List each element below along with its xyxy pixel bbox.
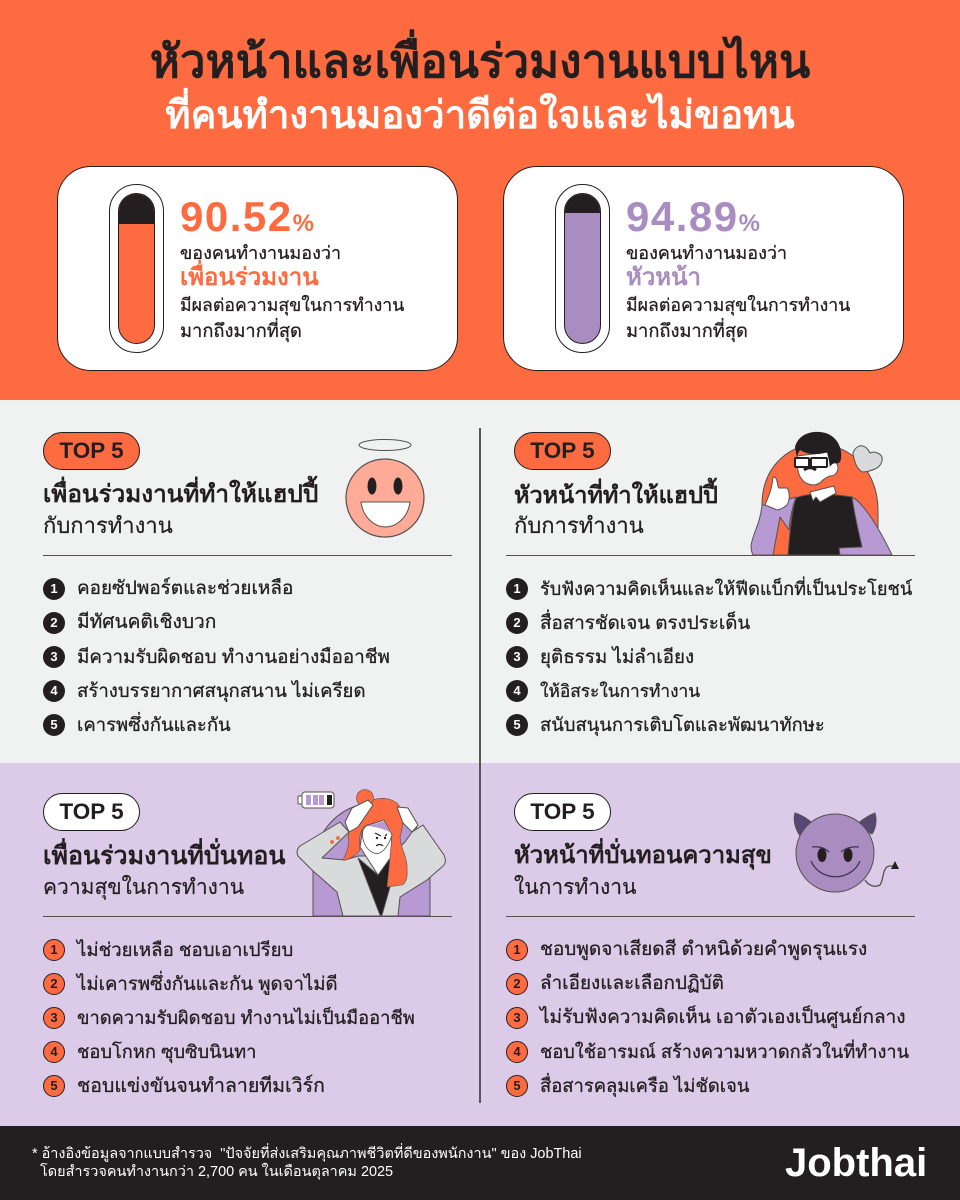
stat line 1: ของคนทำงานมองว่า (626, 243, 787, 263)
stat line 1: ของคนทำงานมองว่า (180, 243, 341, 263)
logo: Jobthai (785, 1141, 927, 1185)
footnote (32, 1143, 582, 1180)
footer (0, 1126, 960, 1200)
footnote: * อ้างอิงข้อมูลจากแบบสำรวจ "ปัจจัยที่ส่งเสริมคุณภาพชีวิตที่ดีของพนักงาน" ของ JobThai (32, 1146, 582, 1162)
title: หัวหน้าและเพื่อนร่วมงานแบบไหน (150, 36, 810, 87)
item 2: สื่อสารชัดเจน ตรงประเด็น (540, 612, 750, 633)
ranked list (43, 939, 415, 1097)
item 4: ชอบใช้อารมณ์ สร้างความหวาดกลัวในที่ทำงาน (540, 1042, 909, 1062)
item 3: 3 (513, 649, 521, 664)
item 4: 4 (50, 1044, 58, 1059)
gauge: 90.52% (109, 184, 164, 353)
subheading: กับการทำงาน (514, 513, 644, 538)
badge: TOP 5 (530, 438, 595, 463)
badge (43, 432, 140, 470)
stat highlight: หัวหน้า (626, 264, 701, 291)
item 4: 4 (50, 683, 58, 698)
stat value: 90.52% (180, 193, 314, 240)
item 4: ชอบโกหก ซุบซิบนินทา (77, 1041, 256, 1062)
stat line 2: มีผลต่อความสุขในการทำงาน (180, 295, 404, 315)
item 5: สื่อสารคลุมเครือ ไม่ชัดเจน (540, 1075, 749, 1096)
item 5: ชอบแข่งขันจนทำลายทีมเวิร์ก (77, 1075, 325, 1097)
item 3: ยุติธรรม ไม่ลำเอียง (540, 646, 694, 667)
subheading: กับการทำงาน (43, 513, 173, 538)
ranked list (506, 576, 912, 736)
item 5: สนับสนุนการเติบโตและพัฒนาทักษะ (540, 714, 825, 735)
gauge: 94.89% (555, 184, 610, 353)
item 4: 4 (513, 1044, 521, 1059)
item 1: ชอบพูดจาเสียดสี ตำหนิด้วยคำพูดรุนแรง (540, 939, 867, 960)
item 2: มีทัศนคติเชิงบวก (77, 612, 216, 633)
icon: devil smiley (794, 812, 899, 892)
icon: angel smiley (345, 439, 425, 538)
panel: draining bosses (506, 793, 915, 1098)
icon: stressed woman (296, 789, 446, 916)
item 4: สร้างบรรยากาศสนุกสนาน ไม่เครียด (77, 680, 366, 701)
heading: เพื่อนร่วมงานที่บั่นทอน (43, 842, 285, 870)
panel: happy colleagues (43, 432, 452, 736)
stat line 2: มีผลต่อความสุขในการทำงาน (626, 295, 850, 315)
item 1: รับฟังความคิดเห็นและให้ฟีดแบ็กที่เป็นประโยชน์ (540, 579, 912, 599)
item 3: 3 (513, 1010, 521, 1025)
stat line 3: มากถึงมากที่สุด (180, 320, 302, 341)
footnote: โดยสำรวจคนทำงานกว่า 2,700 คน ในเดือนตุลาคม 2025 (40, 1164, 393, 1180)
item 1: 1 (50, 581, 58, 596)
item 2: 2 (513, 615, 521, 630)
panel: draining colleagues (43, 789, 452, 1097)
panel: happy background (0, 400, 960, 763)
ranked list (506, 938, 909, 1098)
icon: battery (298, 792, 334, 808)
badge: TOP 5 (59, 438, 124, 463)
item 3: 3 (50, 649, 58, 664)
badge (43, 793, 140, 831)
stat card: bosses (503, 166, 904, 371)
badge: TOP 5 (530, 799, 595, 824)
panel: happy bosses (506, 432, 915, 736)
header band (0, 0, 960, 400)
item 1: 1 (50, 942, 58, 957)
stat card: colleagues (57, 166, 458, 371)
item 5: 5 (513, 1078, 521, 1093)
item 5: 5 (50, 1078, 58, 1093)
item 1: 1 (513, 581, 521, 596)
panel: drain background (0, 763, 960, 1126)
heading: เพื่อนร่วมงานที่ทำให้แฮปปี้ (43, 481, 318, 508)
stat value: 94.89% (626, 193, 760, 240)
item 1: ไม่ช่วยเหลือ ชอบเอาเปรียบ (77, 939, 293, 960)
item 2: ลำเอียงและเลือกปฏิบัติ (540, 973, 724, 994)
item 4: ให้อิสระในการทำงาน (540, 681, 700, 701)
item 3: ไม่รับฟังความคิดเห็น เอาตัวเองเป็นศูนย์กลาง (540, 1007, 906, 1028)
center divider (479, 428, 481, 1103)
item 4: 4 (513, 683, 521, 698)
item 2: 2 (50, 976, 58, 991)
item 1: 1 (513, 942, 521, 957)
stat line 3: มากถึงมากที่สุด (626, 320, 748, 341)
icon: boss with thumbs up (750, 432, 892, 555)
item 5: เคารพซึ่งกันและกัน (77, 714, 231, 735)
item 5: 5 (50, 717, 58, 732)
stat highlight: เพื่อนร่วมงาน (180, 264, 319, 291)
subheading: ในการทำงาน (514, 876, 636, 899)
item 3: มีความรับผิดชอบ ทำงานอย่างมืออาชีพ (77, 646, 390, 667)
badge (514, 432, 611, 470)
item 1: คอยซัปพอร์ตและช่วยเหลือ (77, 578, 293, 599)
heading: หัวหน้าที่ทำให้แฮปปี้ (514, 482, 718, 508)
item 2: 2 (513, 976, 521, 991)
subtitle: ที่คนทำงานมองว่าดีต่อใจและไม่ขอทน (165, 94, 795, 137)
item 2: ไม่เคารพซึ่งกันและกัน พูดจาไม่ดี (77, 973, 338, 994)
item 3: ขาดความรับผิดชอบ ทำงานไม่เป็นมืออาชีพ (77, 1007, 415, 1028)
ranked list (43, 577, 390, 736)
item 5: 5 (513, 717, 521, 732)
item 2: 2 (50, 615, 58, 630)
heading: หัวหน้าที่บั่นทอนความสุข (514, 842, 772, 869)
subheading: ความสุขในการทำงาน (43, 876, 244, 899)
badge (514, 793, 611, 831)
badge: TOP 5 (59, 799, 124, 824)
item 3: 3 (50, 1010, 58, 1025)
